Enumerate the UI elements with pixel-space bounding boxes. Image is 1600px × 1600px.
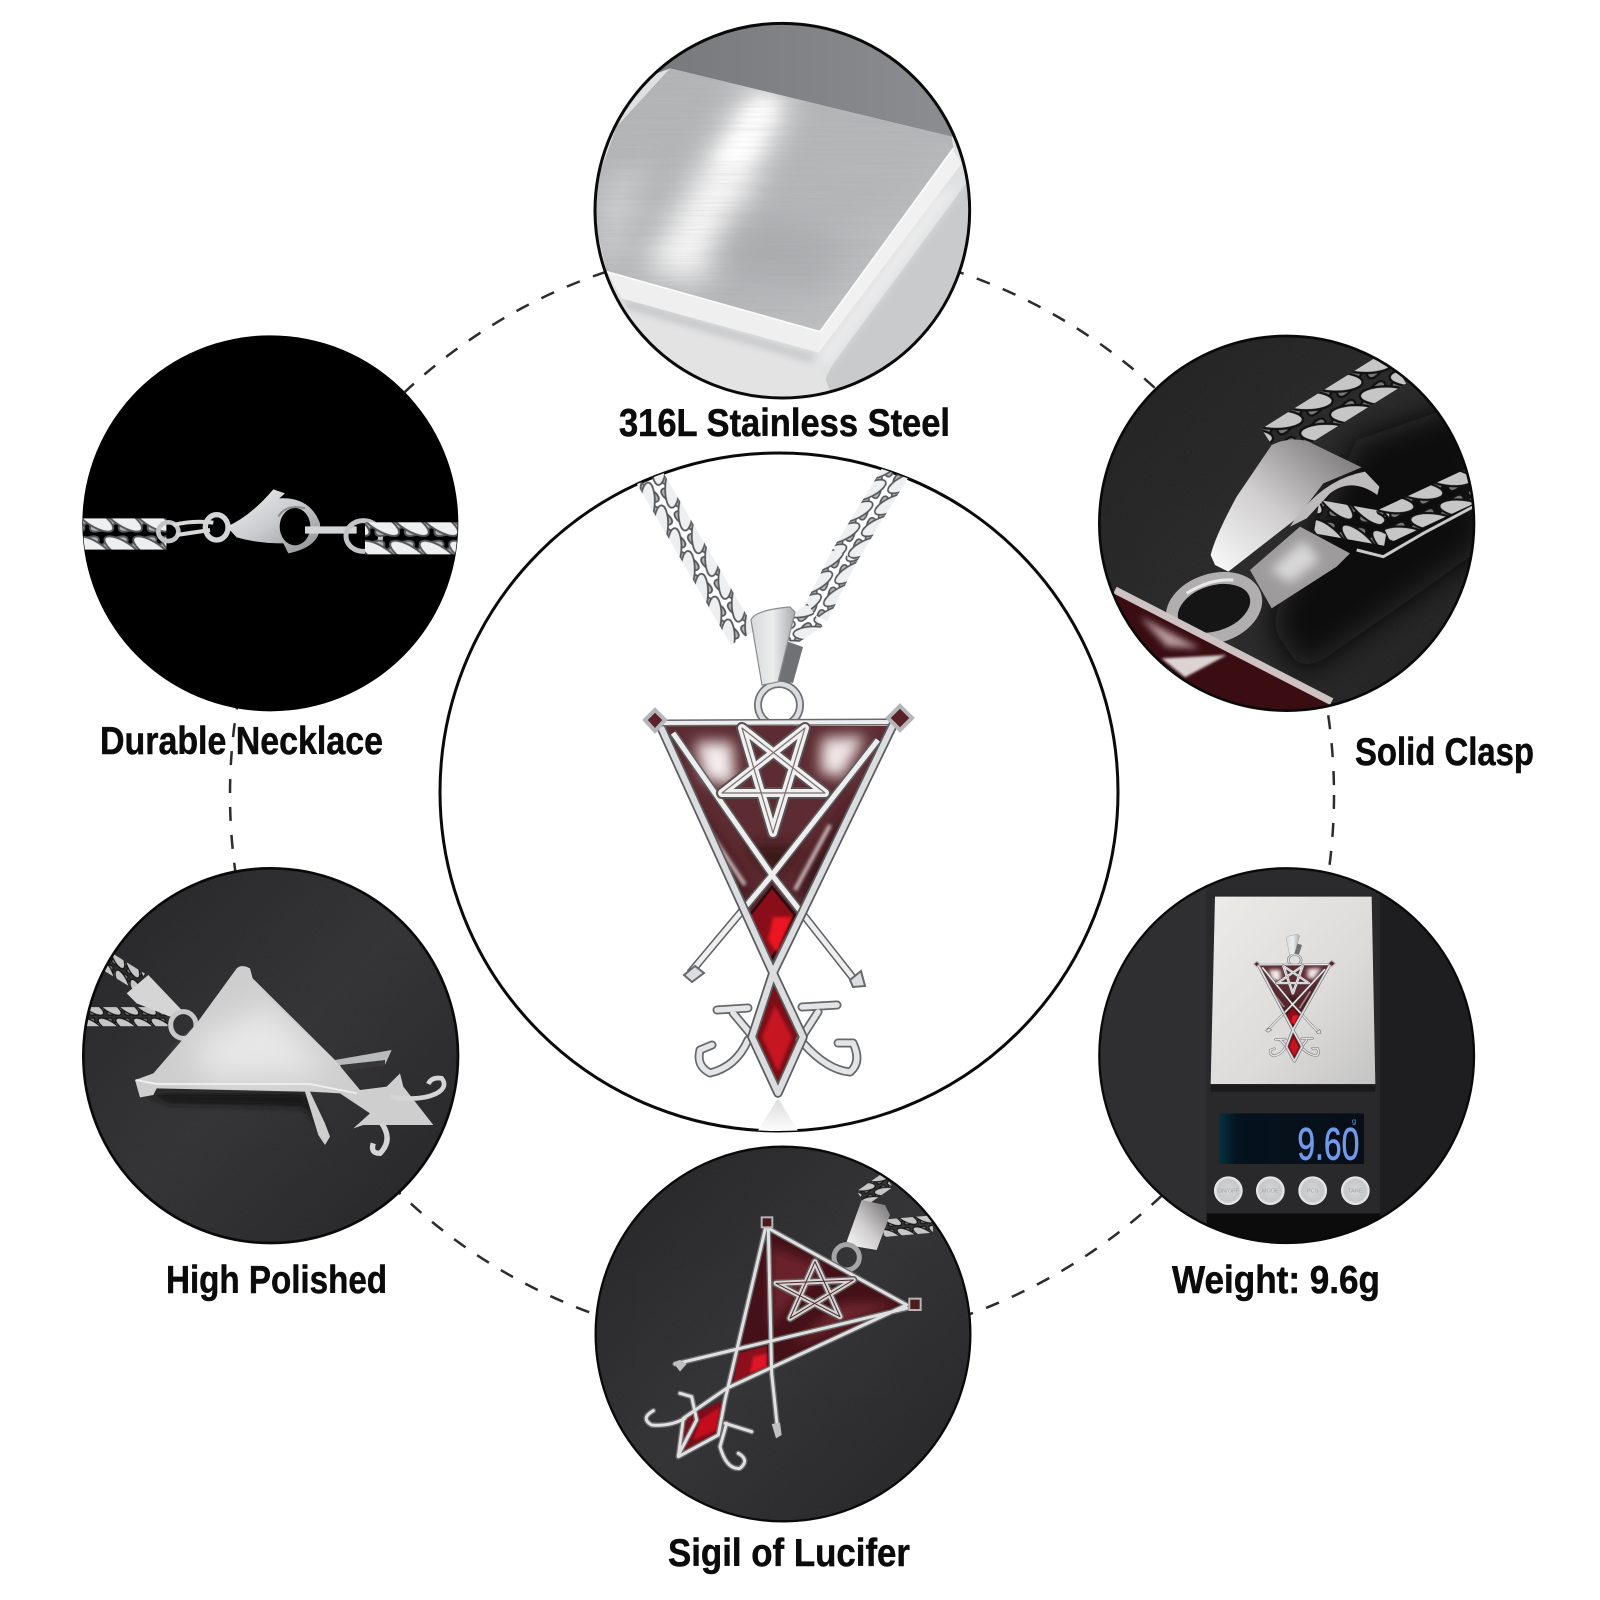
right chain — [1314, 470, 1472, 558]
panel: 316L stainless steel — [587, 20, 980, 403]
dashed connector ring — [230, 243, 1334, 1347]
star — [776, 1262, 853, 1318]
frame lines — [646, 1227, 907, 1468]
buttons — [1214, 1176, 1370, 1205]
back of triangle — [135, 966, 433, 1145]
gems — [733, 1346, 767, 1383]
label: 316L Stainless Steel: 316L Stainless Steel — [619, 402, 950, 445]
label: Solid Clasp: Solid Clasp — [1355, 731, 1534, 774]
buttons: PCS — [1307, 1189, 1319, 1195]
lcd display: 9.60 — [1297, 1118, 1359, 1169]
enamel triangle — [732, 1233, 900, 1382]
corner studs — [762, 1217, 772, 1227]
enamel corner — [1114, 594, 1331, 710]
right chain — [788, 469, 908, 644]
jump ring — [1166, 572, 1262, 642]
panel: high polished — [80, 867, 460, 1247]
label: High Polished: High Polished — [166, 1259, 387, 1302]
bail — [127, 975, 182, 1017]
label: Weight 9.6g: Weight: 9.6g — [1172, 1259, 1380, 1302]
pendant necklace photo — [628, 454, 912, 1134]
scale body — [1206, 893, 1380, 1213]
lobster clasp — [227, 489, 320, 553]
side bar — [335, 1050, 392, 1070]
label: Sigil of Lucifer: Sigil of Lucifer — [668, 1532, 910, 1575]
pendant reflection — [758, 1098, 798, 1131]
lcd display — [1219, 1113, 1364, 1169]
chain right — [365, 522, 461, 554]
panel: sigil of lucifer — [593, 1145, 973, 1525]
left chain — [637, 473, 752, 644]
label: Durable Necklace: Durable Necklace — [100, 720, 383, 763]
chain left — [80, 518, 166, 550]
top chain — [1262, 359, 1406, 444]
chains and bail — [857, 1175, 892, 1202]
buttons: MODE — [1262, 1189, 1279, 1195]
buttons: ON/OFF — [1218, 1189, 1240, 1195]
panel: weight on scale — [1097, 867, 1483, 1247]
panel: solid clasp — [1097, 333, 1487, 723]
scale platter — [1211, 897, 1375, 1084]
bail back — [1250, 527, 1350, 608]
panel: centre pendant circle — [440, 453, 1118, 1134]
chains — [105, 954, 145, 988]
panel: durable necklace — [80, 335, 461, 711]
buttons: TARE — [1348, 1189, 1363, 1195]
lcd display: g — [1352, 1116, 1356, 1125]
small pendant — [1254, 935, 1335, 1061]
bail front — [1211, 439, 1362, 572]
